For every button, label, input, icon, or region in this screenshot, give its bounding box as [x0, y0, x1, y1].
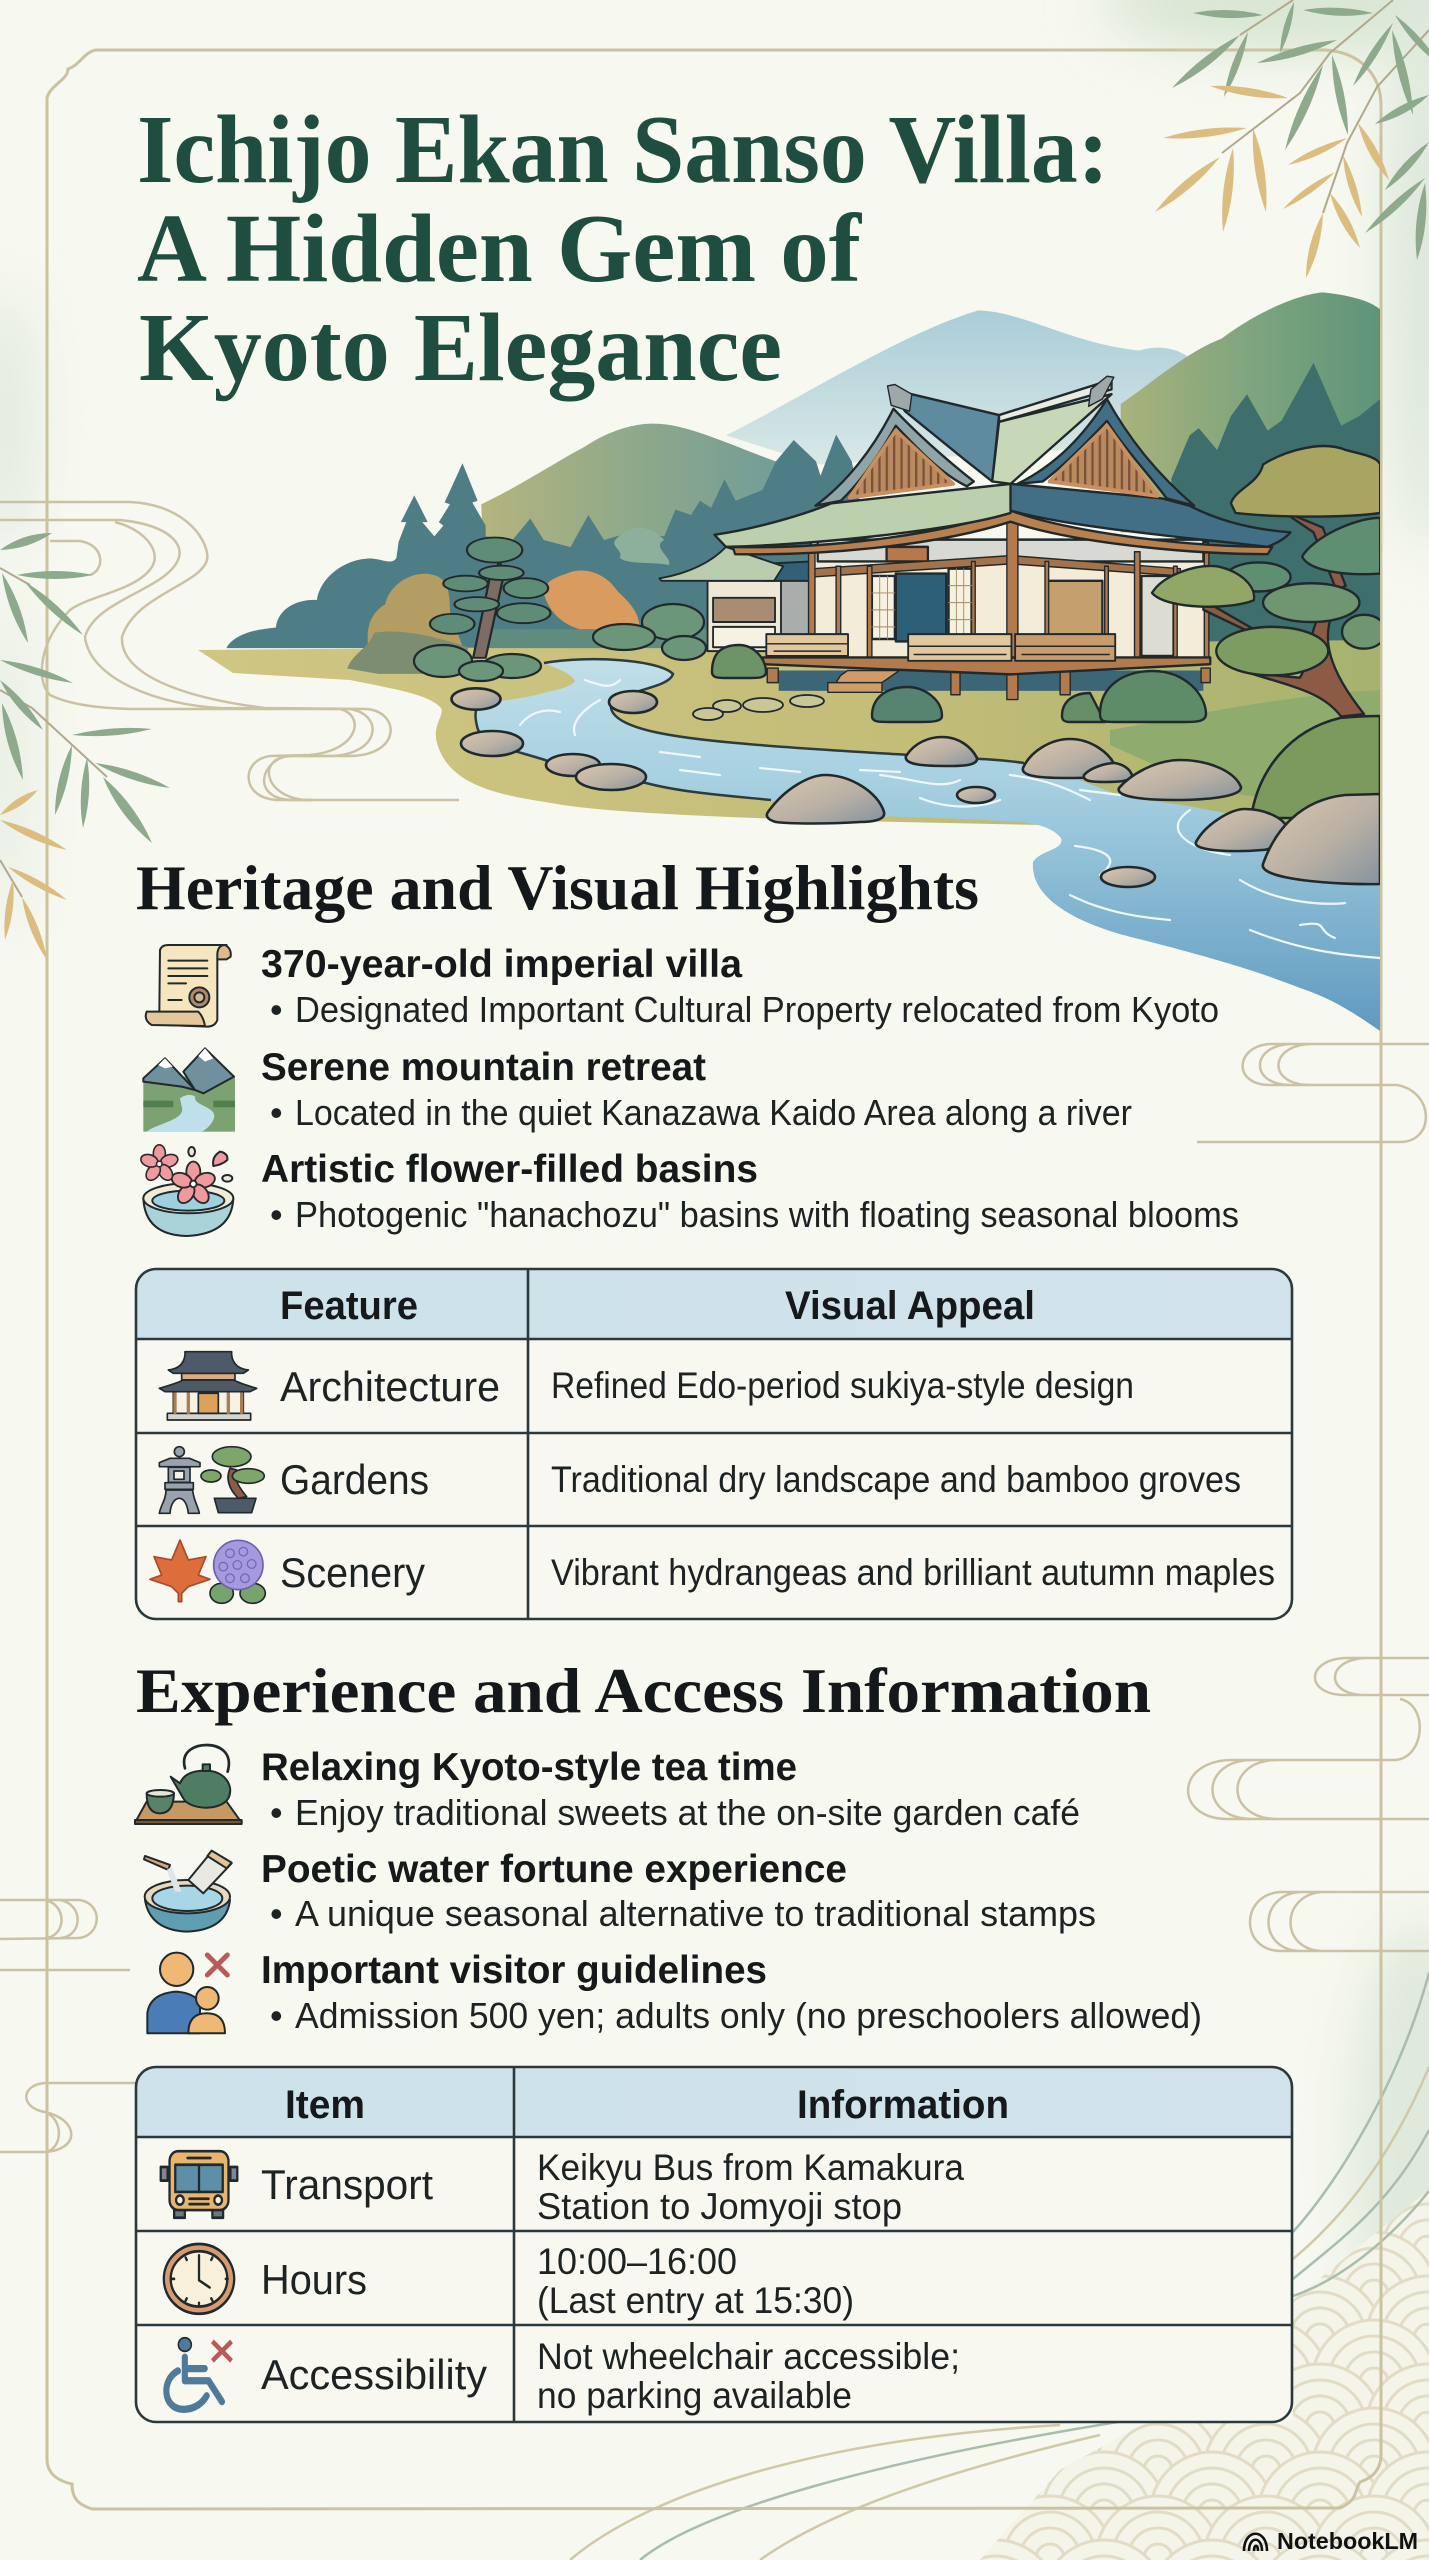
icon: maple leaf and hydrangea: [150, 1540, 265, 1603]
highlight: mountain retreat: Serene mountain retreat: [261, 1046, 706, 1089]
title: Kyoto Elegance: [139, 294, 782, 402]
table: features and visual appeal: Feature: [280, 1284, 418, 1328]
right green mountain: [1121, 292, 1380, 532]
left pine tree: [430, 537, 550, 658]
table: features and visual appeal: Visual Appeal: [785, 1284, 1035, 1328]
highlight: mountain retreat: Located in the quiet Kanazawa Kaido Area along a river: [295, 1092, 1132, 1133]
highlight: imperial villa: •: [270, 989, 283, 1030]
walls: [811, 542, 1208, 661]
eave beam: [733, 511, 1272, 554]
table: practical information: 10:00–16:00: [537, 2241, 737, 2282]
railings: [766, 634, 1115, 661]
lower roof: [714, 484, 1011, 547]
experience: water fortune: A unique seasonal alternative to traditional stamps: [295, 1893, 1096, 1934]
icon: water fortune bowl: [144, 1851, 232, 1932]
garden shrubs: [712, 645, 1206, 722]
mossy boulder: [1251, 716, 1380, 818]
deck: [763, 657, 1210, 674]
river rocks: [452, 688, 1380, 887]
icon: stone lantern and bonsai: [159, 1447, 264, 1513]
title: A Hidden Gem of: [137, 195, 862, 303]
experience: tea time: Relaxing Kyoto-style tea time: [261, 1746, 797, 1789]
table: features and visual appeal: Scenery: [280, 1549, 425, 1596]
forest of dark trees behind right side: [1171, 363, 1380, 642]
title: [137, 96, 1109, 402]
icon: wheelchair with cross: [166, 2338, 232, 2409]
table: features and visual appeal: Gardens: [280, 1456, 429, 1503]
rear roof and ridge: [902, 392, 1000, 483]
steps: [828, 670, 899, 692]
highlight: mountain retreat: •: [270, 1092, 283, 1133]
title: Ichijo Ekan Sanso Villa:: [137, 96, 1109, 204]
highlight: mountain retreat: [261, 1046, 1132, 1133]
table: features and visual appeal: [136, 1269, 1292, 1619]
table: practical information: Hours: [261, 2256, 367, 2303]
distant pale blue mountain: [726, 310, 1190, 464]
experience: tea time: •: [270, 1792, 283, 1833]
highlight: flower basins: [261, 1148, 1239, 1235]
experience: tea time: Enjoy traditional sweets at the on-site garden café: [295, 1792, 1080, 1833]
icon: adult and child with cross: [147, 1953, 227, 2033]
river bank outline: [476, 659, 1024, 800]
experience: visitor guidelines: Important visitor guidelines: [261, 1949, 767, 1992]
background shrubs: [414, 604, 706, 681]
highlight: flower basins: Photogenic "hanachozu" basins with floating seasonal blooms: [295, 1194, 1239, 1235]
table: practical information: Keikyu Bus from Kamakura: [537, 2147, 964, 2188]
table: practical information: no parking available: [537, 2375, 852, 2416]
highlight: flower basins: •: [270, 1194, 283, 1235]
grass ground: [198, 640, 1381, 830]
river ripples: [520, 680, 1380, 958]
experience: water fortune: •: [270, 1893, 283, 1934]
left gable: [815, 409, 974, 506]
icon: temple architecture: [159, 1352, 257, 1420]
experience: visitor guidelines: [261, 1949, 1202, 2036]
table: practical information: (Last entry at 15:30): [537, 2280, 854, 2321]
heading: Heritage and Visual Highlights: Heritage and Visual Highlights: [136, 853, 979, 923]
olive and orange foliage: [347, 571, 709, 674]
icon: flower basin: [139, 1145, 233, 1236]
table: practical information: Transport: [261, 2161, 433, 2208]
left olive and teal mountain: [481, 424, 776, 548]
stepping stones: [693, 695, 824, 720]
highlight: imperial villa: 370-year-old imperial villa: [261, 943, 742, 986]
decoration: sweeping curved lines: [570, 1973, 1429, 2560]
table: practical information: Accessibility: [261, 2351, 487, 2398]
table: practical information: Not wheelchair accessible;: [537, 2336, 960, 2377]
experience: water fortune: Poetic water fortune experience: [261, 1848, 847, 1891]
grass edge near right: [1110, 690, 1380, 796]
icon: mountains and river: [143, 1048, 235, 1132]
experience: water fortune: [261, 1848, 1096, 1934]
icon: clock: [164, 2244, 234, 2314]
icon: teapot and cup: [135, 1745, 242, 1824]
highlight: flower basins: Artistic flower-filled basins: [261, 1148, 758, 1191]
forest of teal trees behind left side: [227, 435, 861, 648]
bamboo: left branches: [0, 533, 170, 960]
icon: bus: [161, 2151, 237, 2218]
shoji lattice: [872, 569, 972, 639]
experience: tea time: [261, 1746, 1080, 1833]
under-deck shadow and posts: [779, 670, 1203, 691]
table: features and visual appeal: Vibrant hydrangeas and brilliant autumn maples: [551, 1552, 1275, 1593]
highlight: imperial villa: Designated Important Cultural Property relocated from Kyoto: [295, 989, 1219, 1030]
decoration: seigaiha wave scales: [980, 2190, 1429, 2560]
table: practical information: [136, 2067, 1292, 2422]
table: practical information: Station to Jomyoji stop: [537, 2186, 902, 2227]
experience: visitor guidelines: Admission 500 yen; adults only (no preschoolers allowed): [295, 1995, 1202, 2036]
watermark: NotebookLM logo: NotebookLM: [1277, 2528, 1418, 2554]
experience: visitor guidelines: •: [270, 1995, 283, 2036]
table: features and visual appeal: Traditional dry landscape and bamboo groves: [551, 1459, 1241, 1500]
river: [476, 659, 1380, 1031]
table: features and visual appeal: Architecture: [280, 1363, 500, 1410]
right gable: [1017, 399, 1194, 506]
icon: scroll: [146, 945, 231, 1027]
illustration: Japanese villa landscape: [198, 292, 1386, 1031]
table: practical information: Information: [797, 2083, 1009, 2127]
ridge ornaments: [888, 376, 1114, 411]
bamboo: top right branches: [1155, 0, 1429, 278]
highlight: imperial villa: [261, 943, 1219, 1030]
decoration: flowing cloud lines: [0, 502, 1429, 2152]
table: features and visual appeal: Refined Edo-period sukiya-style design: [551, 1365, 1134, 1406]
table: practical information: Item: [285, 2083, 365, 2127]
main villa building: [714, 376, 1291, 700]
heading: Experience and Access Information: Experience and Access Information: [136, 1656, 1151, 1726]
right pine tree: [1152, 446, 1386, 717]
side wing of the villa: [659, 547, 811, 651]
